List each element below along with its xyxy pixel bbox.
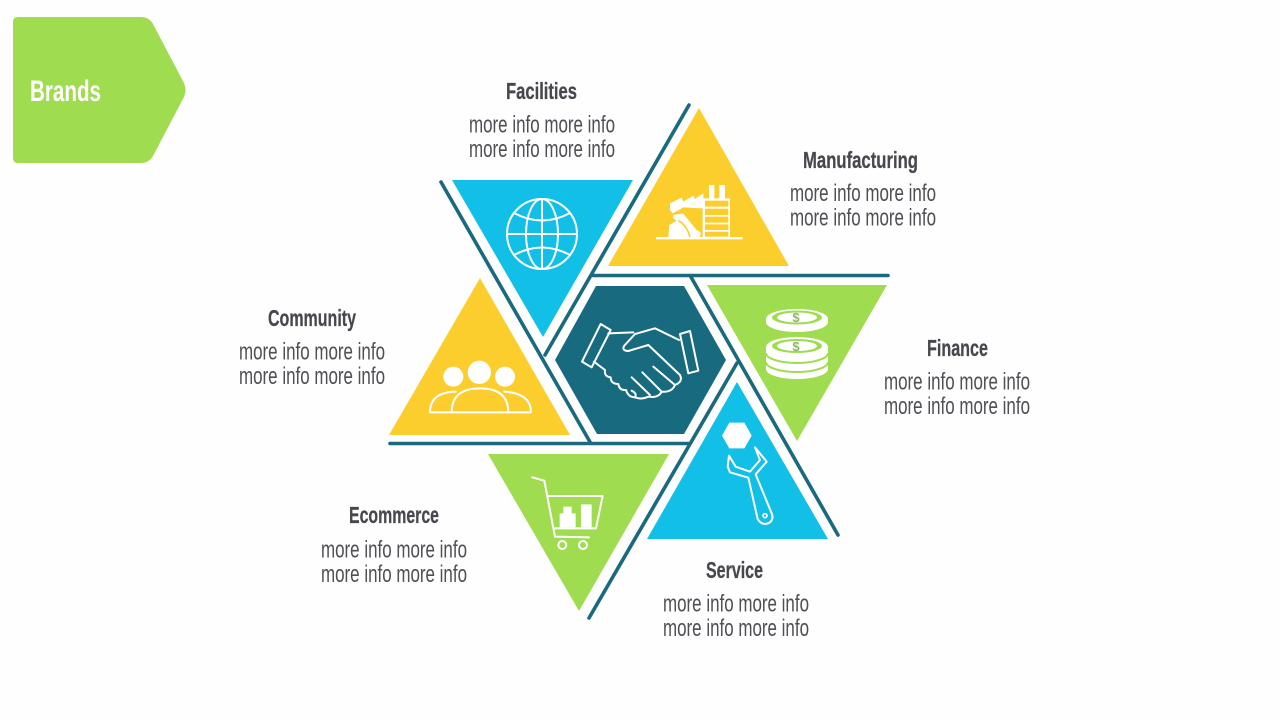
- heading: Facilities: [506, 78, 577, 104]
- icon: wrench and nut: [722, 423, 772, 524]
- description: more info more info: [884, 368, 1030, 396]
- panel: Community: [239, 278, 570, 435]
- central hexagon: partnership: [555, 286, 726, 434]
- heading: Finance: [927, 335, 988, 361]
- frame lines around the star: [390, 105, 888, 618]
- description: [884, 368, 1030, 420]
- badge shape: [13, 17, 186, 163]
- triangle: [707, 285, 887, 441]
- description: more info more info: [469, 112, 615, 138]
- description: [469, 112, 615, 163]
- description: more info more info: [321, 536, 467, 564]
- description: [663, 590, 809, 642]
- icon: shopping cart: [532, 477, 603, 549]
- description: more info more info: [884, 393, 1030, 420]
- heading: Ecommerce: [349, 502, 439, 528]
- description: more info more info: [239, 338, 385, 366]
- heading: Service: [706, 557, 763, 583]
- triangle: [452, 180, 633, 337]
- icon: handshake: [582, 324, 698, 399]
- icon: globe: [507, 199, 577, 269]
- heading: Manufacturing: [803, 147, 918, 173]
- icon: coin stacks: $: [792, 339, 800, 354]
- panel: Finance: [707, 285, 1030, 441]
- description: more info more info: [663, 615, 809, 642]
- description: more info more info: [663, 590, 809, 618]
- description: more info more info: [790, 180, 936, 207]
- icon: coin stacks: $: [792, 310, 800, 325]
- icon: factory: [656, 185, 743, 239]
- description: more info more info: [321, 561, 467, 588]
- description: [790, 180, 936, 232]
- description: [239, 338, 385, 390]
- badge title: Brands: [30, 75, 101, 108]
- description: [321, 536, 467, 588]
- triangle: [389, 278, 570, 435]
- description: more info more info: [469, 136, 615, 163]
- description: more info more info: [790, 204, 936, 232]
- description: more info more info: [239, 363, 385, 390]
- badge: Brands: [13, 17, 186, 163]
- heading: Community: [268, 305, 356, 331]
- panel: Service: [647, 382, 828, 642]
- hexagon: [555, 286, 726, 434]
- panel: Facilities: [452, 78, 633, 337]
- triangle: [647, 382, 828, 539]
- icon: group of people: [430, 361, 531, 412]
- panel: Ecommerce: [321, 454, 669, 611]
- panel: Manufacturing: [608, 108, 936, 266]
- icon: coin stacks: [766, 309, 828, 379]
- triangle: [608, 108, 789, 266]
- triangle: [488, 454, 669, 611]
